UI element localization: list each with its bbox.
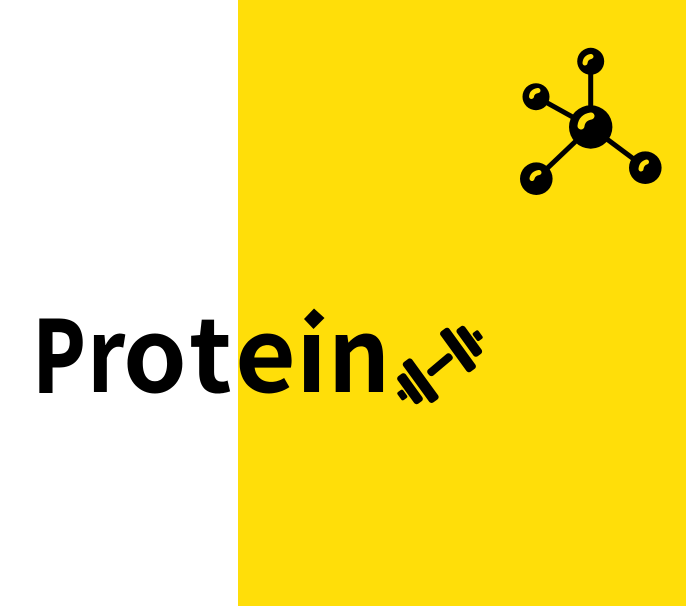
icon: dumbbell bbox=[396, 325, 483, 405]
icon: molecule bbox=[520, 48, 662, 195]
panel: yellow background bbox=[238, 0, 686, 606]
title: Protein: P bbox=[33, 279, 85, 421]
title: Protein: r bbox=[87, 274, 125, 422]
icon: diamond dot of the letter i bbox=[296, 300, 328, 332]
title: Protein: o bbox=[123, 274, 187, 422]
title: Protein: e bbox=[235, 274, 296, 422]
title: Protein: i bbox=[296, 274, 327, 422]
title: Protein: t bbox=[189, 274, 232, 422]
title: Protein: n bbox=[328, 274, 390, 422]
